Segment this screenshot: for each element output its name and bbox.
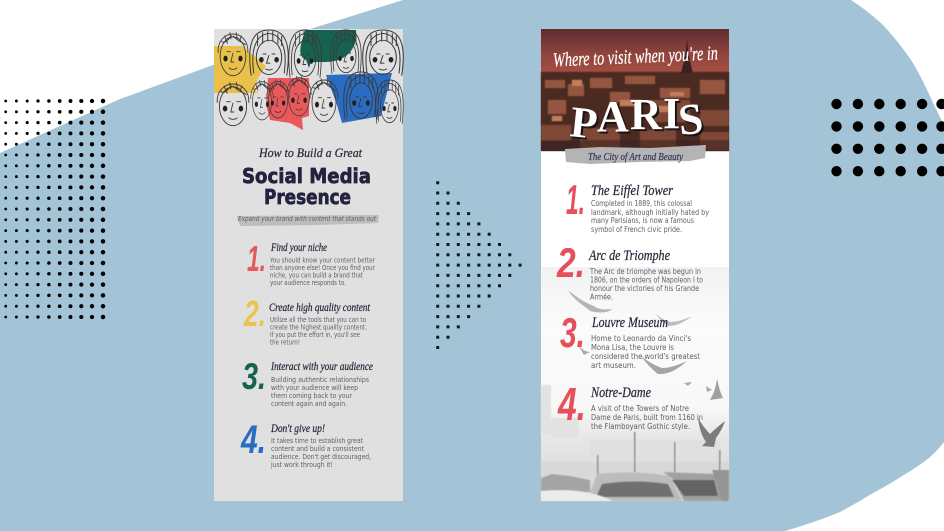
step 4: It takes time to establish great — [271, 437, 363, 445]
dot grid: centre triangle arrow — [438, 181, 520, 350]
stop 1: eiffel tower — [566, 176, 709, 234]
step 4 — [240, 418, 371, 469]
step 2: Create high quality content — [269, 302, 371, 314]
stop 4: notre-dame: the Flamboyant Gothic style. — [591, 422, 690, 431]
step 3: Building authentic relationships — [271, 376, 369, 384]
stop 4: notre-dame — [557, 378, 703, 431]
stop 2: arc de triomphe: Armée. — [590, 292, 613, 302]
stop 4: notre-dame: A visit of the Towers of Notre — [591, 404, 689, 413]
step 2: Utilize all the tools that you can to — [270, 316, 366, 324]
step 1: 1. — [247, 238, 266, 279]
step 4: just work through it! — [270, 461, 333, 469]
stop 1: eiffel tower: many Parisians, is now a famous — [591, 216, 694, 225]
step 3: content again and again. — [271, 400, 347, 408]
step 1: Find your niche — [270, 242, 327, 254]
step 1 — [247, 238, 375, 287]
stop 1: eiffel tower: Completed in 1889, this colossal — [591, 199, 692, 208]
panel: paris — [541, 29, 729, 501]
header title: Where to visit when you're in — [553, 42, 718, 72]
subtitle on torn grey band: The City of Art and Beauty — [588, 152, 683, 163]
step 3: Interact with your audience — [270, 361, 373, 373]
step 4: Don't give up! — [270, 423, 325, 435]
stop 2: arc de triomphe — [556, 239, 703, 302]
stop 3: louvre museum: Mona Lisa, the Louvre is — [591, 343, 674, 352]
stop 4: notre-dame: 4. — [557, 378, 586, 430]
illustration: crowd of faces with speech bubbles — [214, 30, 403, 130]
stop 2: arc de triomphe: honour the victories of his Grande — [590, 284, 699, 293]
stop 3: louvre museum: 3. — [560, 309, 585, 356]
heading: Social Media — [242, 164, 371, 188]
tagline on grey swash — [237, 215, 379, 226]
step 1: your audience responds to. — [270, 279, 346, 287]
stop 1: eiffel tower: The Eiffel Tower — [591, 183, 673, 199]
dot grid: right — [836, 104, 942, 173]
step 1: niche, you can build a brand that — [270, 271, 363, 279]
PARIS wordmark: PARIS — [570, 91, 707, 151]
heading — [242, 145, 371, 209]
step 2: the return! — [270, 338, 300, 346]
stop 3: louvre museum — [560, 309, 700, 370]
step 4: audience. Don't get discouraged, — [271, 453, 371, 461]
step 3: with your audience will keep — [271, 384, 358, 392]
PARIS wordmark: PARIS — [568, 89, 705, 149]
step 1: than anyone else! Once you find your — [270, 264, 375, 272]
stop 2: arc de triomphe: 2. — [556, 239, 585, 286]
stop 4: notre-dame: Notre-Dame — [590, 385, 651, 401]
stop 3: louvre museum: considered the world's greatest — [591, 352, 700, 361]
stop 2: arc de triomphe: The Arc de triomphe was begun in — [589, 267, 701, 276]
stop 2: arc de triomphe: Arc de Triomphe — [588, 248, 670, 264]
step 4: content and build a consistent — [271, 445, 364, 453]
stop 3: louvre museum: Louvre Museum — [591, 315, 668, 331]
heading: How to Build a Great — [258, 145, 362, 160]
stop 2: arc de triomphe: 1806, on the orders of Napoleon I to — [590, 276, 703, 284]
background photo: grey street with birds — [541, 267, 729, 501]
step 2 — [243, 293, 371, 346]
stop 1: eiffel tower: landmark, although initially hated by — [591, 208, 709, 217]
dot grid: left — [6, 101, 103, 318]
stop 1: eiffel tower: symbol of French civic pride. — [591, 225, 682, 234]
stop 1: eiffel tower: 1. — [566, 176, 585, 223]
step 1: You should know your content better — [269, 256, 375, 264]
header photo: paris skyline at sunset — [541, 29, 729, 151]
step 2: 2. — [243, 293, 266, 334]
step 4: 4. — [240, 418, 266, 462]
stop 3: louvre museum: Home to Leonardo da Vinci's — [591, 334, 691, 343]
stop 3: louvre museum: art museum. — [591, 361, 636, 370]
tagline on grey swash: Expand your brand with content that stands out — [238, 215, 376, 223]
step 3 — [242, 356, 373, 408]
panel: social media presence — [214, 29, 403, 501]
step 3: them coming back to your — [271, 392, 352, 400]
stop 4: notre-dame: Dame de Paris, built from 1160 in — [591, 413, 703, 422]
step 2: create the highest quality content. — [270, 324, 367, 332]
subtitle on torn grey band — [565, 145, 706, 164]
step 2: If you put the effort in, you'll see — [270, 331, 360, 339]
heading: Presence — [264, 185, 351, 209]
step 3: 3. — [242, 356, 266, 397]
